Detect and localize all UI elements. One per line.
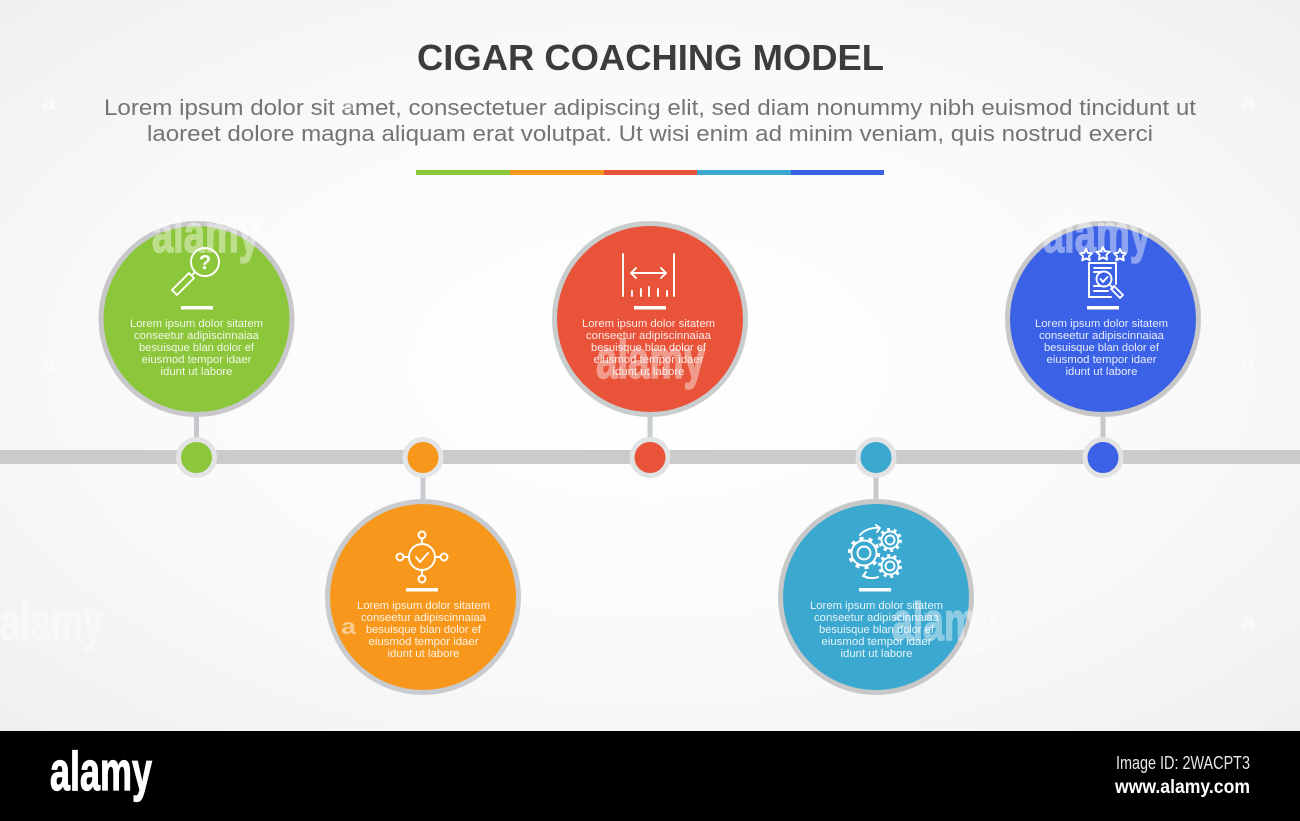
icon: magnifier with question mark xyxy=(172,248,219,295)
text: step 4: conseetur adipiscinnaiaa xyxy=(814,612,940,624)
icon: rated document with magnifier xyxy=(1080,247,1126,298)
text: step 3 xyxy=(582,318,715,378)
watermarks: a xyxy=(643,90,658,115)
watermarks xyxy=(0,90,1256,652)
text: step 5: besuisque blan dolor ef xyxy=(1044,342,1160,354)
watermarks: alamy xyxy=(892,592,998,652)
subtitle text block xyxy=(104,95,1196,146)
step 2: orange xyxy=(328,440,518,692)
footer bar xyxy=(0,731,1300,821)
icon: magnifier with question mark: ? xyxy=(199,252,211,274)
watermarks: alamy xyxy=(1043,204,1151,264)
subtitle text block: Lorem ipsum dolor sit amet, consectetuer adipiscing elit, sed diam nonummy nibh euismod tincidunt ut xyxy=(104,95,1196,120)
footer image id: Image ID: 2WACPT3 xyxy=(1116,753,1250,773)
watermarks: a xyxy=(42,90,57,115)
text: step 5 xyxy=(1035,318,1168,378)
text: step 3: besuisque blan dolor ef xyxy=(591,342,707,354)
text: step 3: conseetur adipiscinnaiaa xyxy=(586,330,712,342)
watermarks: a xyxy=(42,350,57,375)
text: step 5: conseetur adipiscinnaiaa xyxy=(1039,330,1165,342)
text: step 2: besuisque blan dolor ef xyxy=(366,624,482,636)
subtitle text block: laoreet dolore magna aliquam erat volutpat. Ut wisi enim ad minim veniam, quis nostrud exerci xyxy=(147,121,1153,146)
text: step 1: conseetur adipiscinnaiaa xyxy=(134,330,260,342)
text: step 5: idunt ut labore xyxy=(1066,366,1138,378)
icon: network check xyxy=(396,532,448,582)
text: step 1: Lorem ipsum dolor sitatem xyxy=(130,318,263,330)
text: step 2: idunt ut labore xyxy=(388,648,460,660)
text: step 1 xyxy=(130,318,263,378)
watermarks: alamy xyxy=(596,330,705,390)
text: step 4: idunt ut labore xyxy=(840,648,912,660)
text: step 4: Lorem ipsum dolor sitatem xyxy=(810,600,943,612)
watermarks: a xyxy=(1241,350,1256,375)
watermarks: alamy xyxy=(0,592,103,652)
footer website: www.alamy.com xyxy=(1114,777,1250,798)
timeline bar xyxy=(0,450,1300,464)
text: step 2 xyxy=(357,600,490,660)
icon: measuring ruler xyxy=(623,254,674,296)
text: step 3: Lorem ipsum dolor sitatem xyxy=(582,318,715,330)
text: step 1: eiusmod tempor idaer xyxy=(142,354,252,366)
step 4: teal xyxy=(780,440,972,692)
text: step 5: eiusmod tempor idaer xyxy=(1046,354,1157,366)
text: step 4 xyxy=(810,600,943,660)
text: step 4: besuisque blan dolor ef xyxy=(819,624,935,636)
text: step 1: besuisque blan dolor ef xyxy=(139,342,255,354)
watermarks: alamy xyxy=(152,204,260,264)
title: CIGAR COACHING MODEL xyxy=(417,37,884,78)
multicolour divider bar xyxy=(416,170,884,175)
watermarks: a xyxy=(339,90,354,115)
text: step 2: Lorem ipsum dolor sitatem xyxy=(357,600,490,612)
step 5: blue xyxy=(1008,224,1198,476)
watermarks: a xyxy=(1241,610,1256,635)
text: step 3: idunt ut labore xyxy=(612,366,684,378)
icon: gears with cycle arrows xyxy=(850,525,900,578)
text: step 5: Lorem ipsum dolor sitatem xyxy=(1035,318,1168,330)
text: step 1: idunt ut labore xyxy=(160,366,232,378)
text: step 2: eiusmod tempor idaer xyxy=(368,636,479,648)
text: step 4: eiusmod tempor idaer xyxy=(822,636,932,648)
text: step 3: eiusmod tempor idaer xyxy=(594,354,704,366)
footer logo: alamy xyxy=(50,740,152,802)
step 1: green xyxy=(101,224,292,476)
watermarks: a xyxy=(341,614,357,639)
watermarks: a xyxy=(1241,90,1256,115)
step 3: red xyxy=(554,224,746,476)
text: step 2: conseetur adipiscinnaiaa xyxy=(361,612,487,624)
